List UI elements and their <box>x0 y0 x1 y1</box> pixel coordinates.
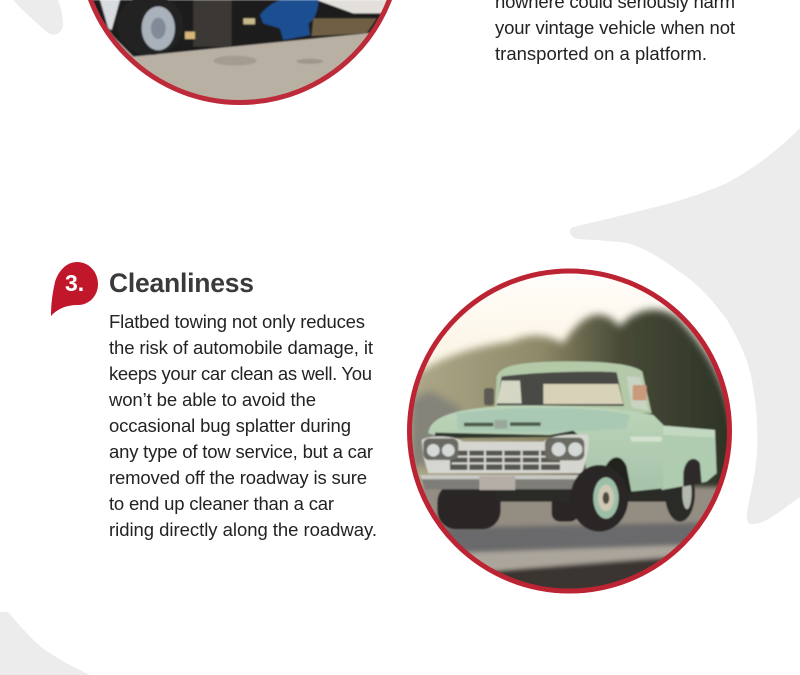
chrome front <box>422 434 589 473</box>
text block: cleanliness description: any type of tow service, but a car <box>109 441 373 462</box>
text block: previous section ending: transported on a platform. <box>495 43 707 64</box>
hood and body <box>428 406 663 492</box>
text block: cleanliness description: removed off the roadway is sure <box>109 467 367 488</box>
heading: Cleanliness: Cleanliness <box>109 268 254 298</box>
front wheel arch <box>602 457 632 493</box>
text block: cleanliness description: riding directly along the roadway. <box>109 519 377 540</box>
text block: cleanliness description <box>108 311 377 540</box>
ground bands <box>422 484 718 588</box>
front tire <box>570 465 628 532</box>
text block: previous section ending: your vintage vehicle when not <box>495 17 735 38</box>
circle border <box>410 271 730 591</box>
background shape: top left blob <box>13 0 63 35</box>
bumper <box>421 478 576 490</box>
text block: cleanliness description: the risk of automobile damage, it <box>109 337 373 358</box>
truck bed <box>662 426 717 490</box>
rear tires <box>437 483 501 529</box>
number badge: 3 <box>51 262 98 316</box>
photo circle: vintage green pickup truck <box>400 260 740 600</box>
undercarriage <box>497 487 670 502</box>
text block: cleanliness description: keeps your car clean as well. You <box>109 363 372 384</box>
background shape: right swoosh <box>570 128 800 524</box>
text block: cleanliness description: Flatbed towing not only reduces <box>109 311 365 332</box>
circle border <box>80 0 400 102</box>
background shape: bottom left corner <box>0 612 90 675</box>
text block: cleanliness description: won’t be able to avoid the <box>108 389 316 410</box>
headlights <box>423 438 458 460</box>
text block: previous section ending <box>495 0 735 64</box>
text block: cleanliness description: to end up cleaner than a car <box>109 493 334 514</box>
text block: cleanliness description: occasional bug splatter during <box>109 415 351 436</box>
number badge: 3: 3. <box>65 270 84 296</box>
photo circle: tow truck crop <box>80 0 400 107</box>
cab roof and glass <box>495 361 652 413</box>
